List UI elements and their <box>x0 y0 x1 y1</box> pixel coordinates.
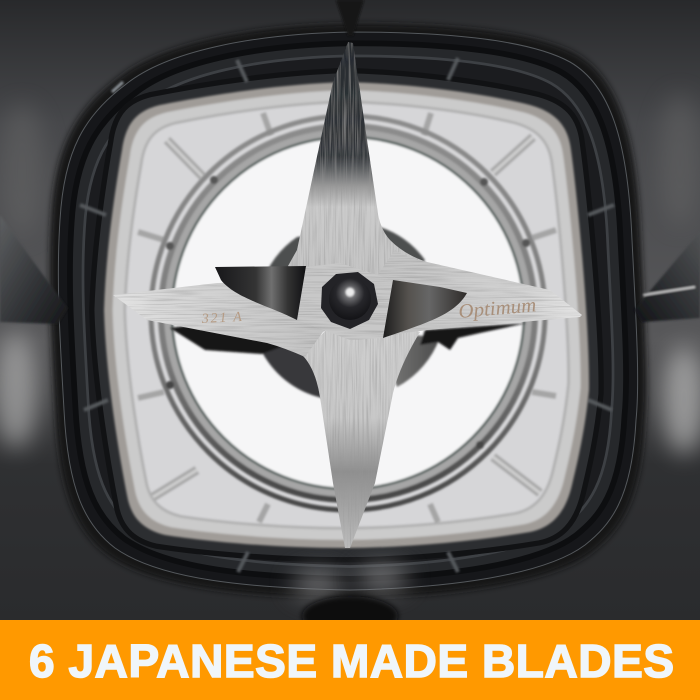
bottom jar spout shadow <box>292 564 408 636</box>
dark hub behind the blades <box>170 227 527 398</box>
banner heading: 6 JAPANESE MADE BLADES <box>29 635 674 687</box>
blade engraving: Optimum: Optimum <box>458 294 537 323</box>
dark bevel: left <box>215 266 306 320</box>
dark rim of the jar base <box>50 24 646 598</box>
circular ring and white opening <box>151 116 545 510</box>
blade engraving: 321 A: 321 A <box>200 310 243 327</box>
center bolt <box>321 272 378 329</box>
blade: top <box>288 42 427 300</box>
banner: orange footer strip <box>0 620 700 700</box>
central mounting plate <box>297 263 393 340</box>
blade: right <box>360 250 582 336</box>
inner light square floor with window cells <box>104 82 589 548</box>
side wall fins <box>0 0 700 324</box>
blade: bottom <box>300 310 420 548</box>
four-point blade assembly <box>113 42 582 548</box>
blade: left <box>113 281 335 357</box>
dark bevel: right <box>383 280 467 338</box>
